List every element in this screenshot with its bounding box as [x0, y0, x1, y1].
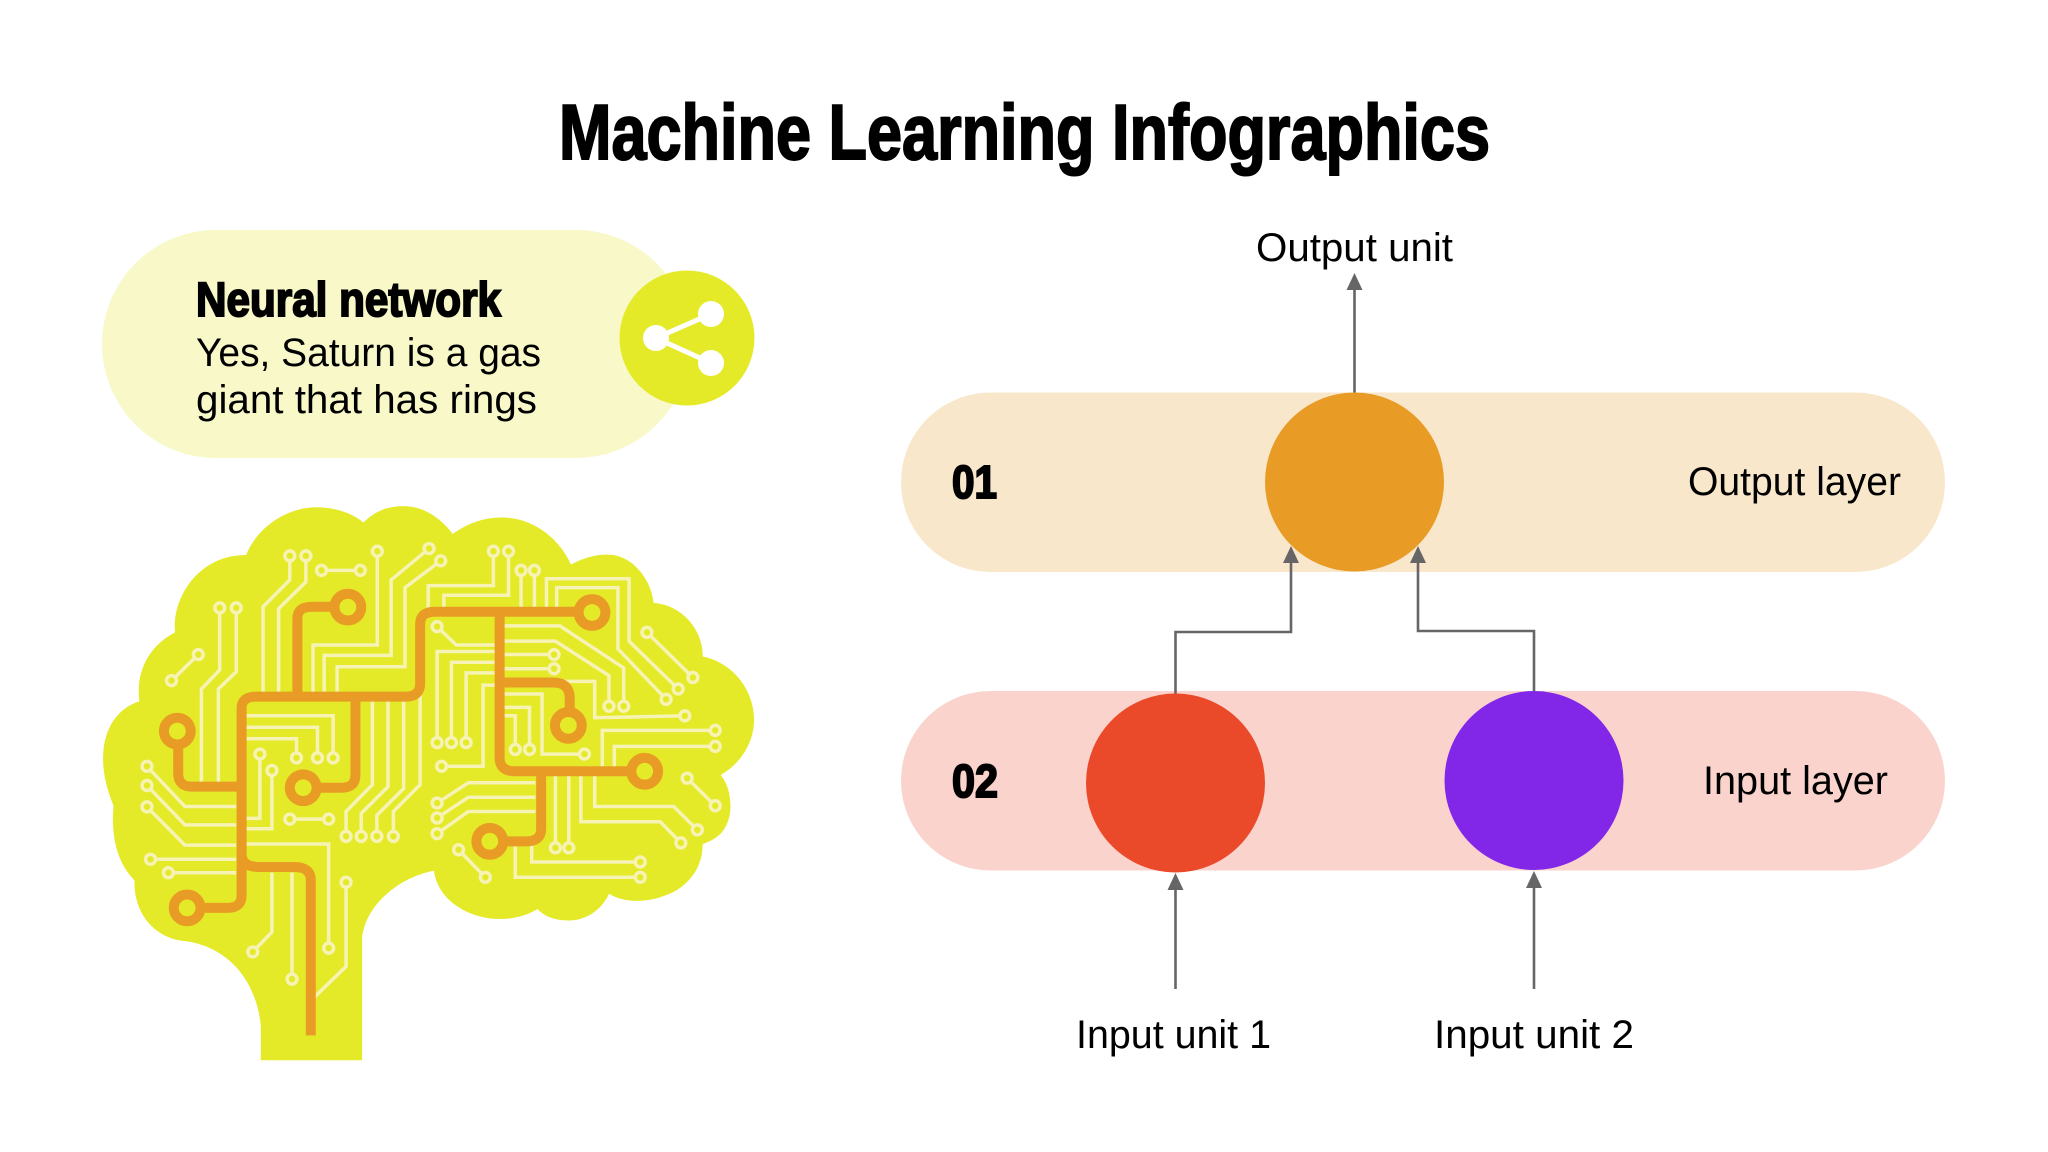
band label input layer: Input layer — [1703, 759, 1888, 803]
arrow: output — [1346, 273, 1362, 394]
band label output layer: Output layer — [1688, 460, 1901, 504]
band: input layer — [901, 691, 1945, 870]
arrow: input 1 — [1168, 873, 1184, 989]
label: input unit 2: Input unit 2 — [1434, 1013, 1634, 1057]
label: output unit: Output unit — [1256, 226, 1453, 270]
title: Machine Learning Infographics — [559, 88, 1490, 176]
thin circuit traces — [147, 549, 715, 997]
node: input unit 2 circle — [1444, 691, 1624, 870]
icon: share — [620, 270, 754, 406]
panel description — [196, 331, 541, 422]
node: output unit circle — [1265, 392, 1444, 572]
arrow: input 2 — [1526, 871, 1542, 989]
band number 02: 02 — [952, 755, 998, 807]
node: input unit 1 circle — [1086, 694, 1265, 872]
panel description: giant that has rings — [196, 378, 537, 422]
small circuit nodes — [142, 544, 720, 984]
connector arrow: input 1 to output — [1176, 546, 1299, 694]
connector arrow: input 2 to output — [1410, 546, 1534, 692]
panel background — [102, 230, 690, 458]
panel heading: Neural network — [196, 274, 501, 327]
band: output layer — [901, 392, 1945, 572]
panel: neural network — [102, 230, 754, 458]
brain silhouette — [103, 506, 754, 1060]
band number 01: 01 — [952, 456, 997, 508]
brain circuit illustration — [103, 506, 754, 1060]
panel description: Yes, Saturn is a gas — [196, 331, 541, 375]
large orange nodes — [164, 594, 658, 921]
thick orange circuit paths — [178, 607, 645, 1035]
label: input unit 1: Input unit 1 — [1076, 1013, 1271, 1057]
